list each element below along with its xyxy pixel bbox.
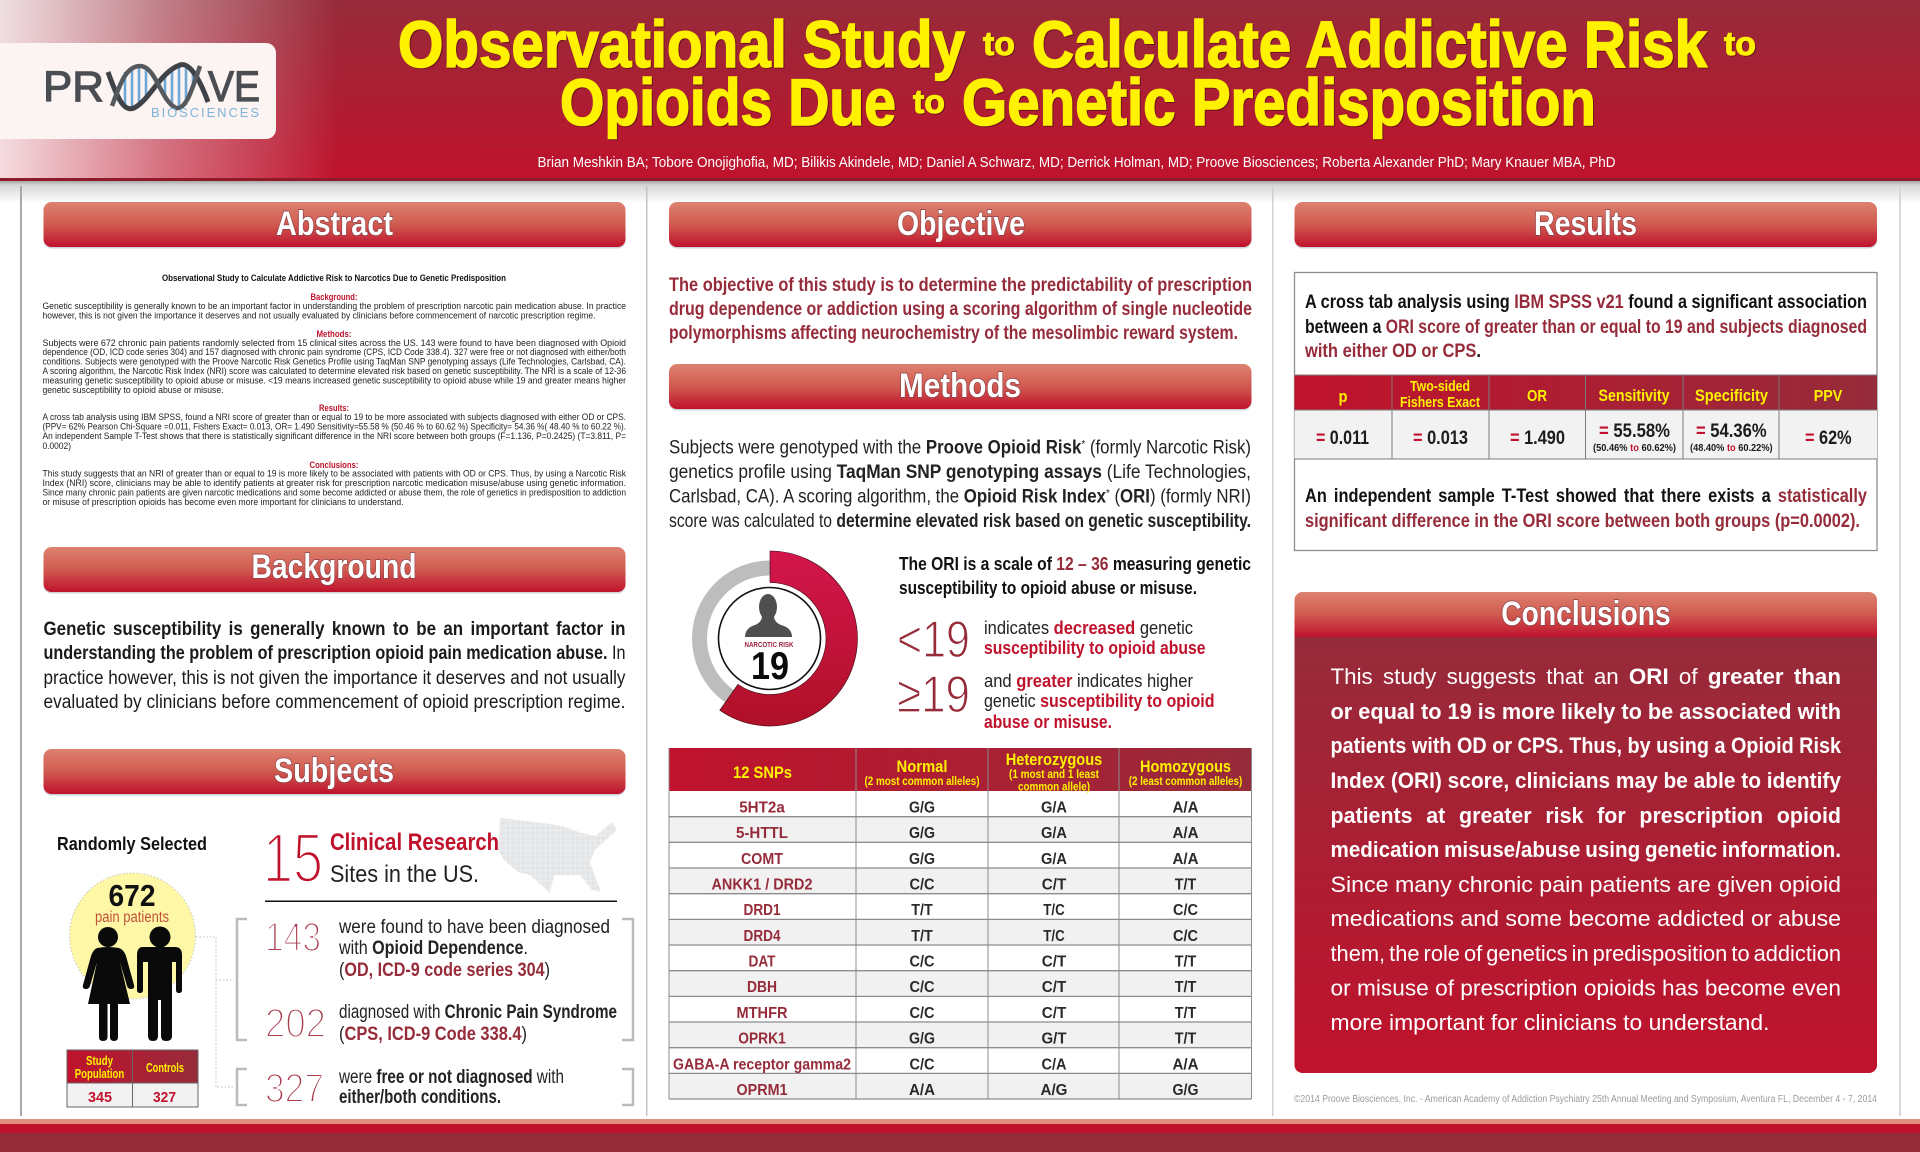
objective text block: polymorphisms affecting neurochemistry of the mesolimbic reward system. — [669, 323, 1238, 344]
table: 12 SNPs: DBH — [747, 979, 777, 996]
abstract text block: conditions. Subjects were genotyped with the Proove Narcotic Risk Genetics Profile using TaqMan SNP genotyping assays (Life Technologies, Carlsbad, CA). — [42, 356, 626, 368]
table: 12 SNPs: C/T — [1042, 876, 1066, 894]
abstract text block: Methods: — [316, 329, 352, 340]
population circle: pain patients — [95, 909, 169, 926]
t-test text: An independent sample T-Test showed that there exists a statistically — [1305, 486, 1867, 507]
stat: 143 opioid dependence — [265, 914, 610, 981]
stat: 327 free or not diagnosed: were free or not diagnosed with — [338, 1067, 564, 1088]
abstract text block: genetic susceptibility to opioid abuse or misuse. — [42, 385, 224, 396]
panel: methods — [669, 364, 1252, 1099]
table: 12 SNPs: (2 most common alleles) — [864, 776, 980, 788]
table: 12 SNPs: C/T — [1042, 979, 1066, 996]
table: 12 SNPs: OPRK1 — [738, 1030, 786, 1048]
table: 12 SNPs: COMT — [741, 851, 783, 868]
stat: 202 chronic pain syndrome: diagnosed with Chronic Pain Syndrome — [339, 1002, 617, 1023]
results intro text — [1304, 292, 1867, 362]
table: statistics: = 62% — [1805, 428, 1852, 449]
dotted connector — [196, 937, 234, 1087]
t-test text — [1305, 486, 1867, 532]
table: 12 SNPs: A/A — [1172, 825, 1199, 842]
abstract text block: Results: — [319, 403, 349, 414]
table: statistics: Two-sided — [1410, 378, 1470, 395]
heading: methods — [669, 364, 1252, 410]
table: 12 SNPs: C/C — [910, 954, 935, 970]
table: 12 SNPs: (2 least common alleles) — [1129, 776, 1242, 788]
map of the United States — [498, 818, 617, 893]
panel: results — [1294, 202, 1877, 550]
conclusions text block: them, the role of genetics in predisposition to addiction — [1330, 941, 1841, 966]
methods text block: * — [1081, 438, 1086, 450]
table: statistics — [1294, 375, 1877, 459]
table: 12 SNPs: G/T — [1042, 1030, 1067, 1048]
table: 12 SNPs: A/A — [1172, 851, 1199, 868]
title: to — [1724, 25, 1756, 62]
background text block: evaluated by clinicians before commencement of opioid prescription regime. — [44, 692, 626, 713]
methods text block: (formly Narcotic Risk) — [1085, 438, 1251, 458]
table: 12 SNPs: G/A — [1041, 851, 1067, 868]
table: statistics: Sensitivity — [1598, 386, 1670, 405]
stat: 327 free or not diagnosed: 327 — [265, 1065, 324, 1111]
table: statistics: = 1.490 — [1510, 428, 1565, 449]
methods text block: * — [1106, 488, 1110, 500]
table: 12 SNPs: (1 most and 1 least — [1009, 769, 1099, 781]
title: Observational Study — [398, 7, 965, 81]
table: statistics: = 55.58% — [1599, 421, 1670, 442]
table: 12 SNPs: G/G — [909, 1030, 935, 1048]
column divider: centre right — [1272, 186, 1274, 1116]
icon: person — [745, 594, 792, 637]
heading: abstract: Abstract — [276, 205, 393, 243]
table: study population and controls: Study — [86, 1054, 113, 1068]
conclusions text block — [1330, 664, 1842, 1035]
less than 19 — [897, 611, 1206, 669]
table: statistics: PPV — [1814, 388, 1843, 405]
methods text block — [669, 438, 1251, 532]
table: 12 SNPs: DRD1 — [744, 902, 781, 919]
table: 12 SNPs: C/T — [1042, 1005, 1066, 1022]
methods text block: (ORI) (formly NRI) — [1115, 486, 1264, 508]
table: statistics: Fishers Exact — [1400, 394, 1480, 411]
stat: 143 opioid dependence: were found to have been diagnosed — [338, 917, 610, 938]
table: 12 SNPs: C/C — [910, 1056, 935, 1074]
methods text block: Carlsbad, CA). A scoring algorithm, the Opioid Risk Index — [669, 486, 1124, 508]
table: 12 SNPs: OPRM1 — [736, 1082, 788, 1099]
abstract text block: measuring genetic susceptibility to opioid abuse or misuse. <19 means increased genetic susceptibility to opioid abuse while 19 and greater means higher — [42, 376, 627, 386]
table: study population and controls: 327 — [153, 1089, 176, 1106]
table: study population and controls: Population — [75, 1067, 124, 1081]
abstract text block: Conclusions: — [310, 460, 358, 471]
table: statistics: = 54.36% — [1696, 421, 1767, 442]
table: 12 SNPs: C/A — [1042, 1056, 1067, 1074]
fifteen clinical research sites: Clinical Research — [330, 829, 499, 856]
table: study population and controls: 345 — [88, 1089, 112, 1106]
abstract text block: A cross tab analysis using IBM SPSS, found a NRI score of greater than or equal to 19 to be more associated with subjects diagnosed with either OD or CPS. — [42, 412, 626, 423]
greater than or equal to 19 — [897, 666, 1214, 732]
table: 12 SNPs: A/A — [909, 1082, 935, 1099]
table: study population and controls: Controls — [146, 1061, 184, 1075]
heading: conclusions — [1294, 592, 1877, 637]
table: 12 SNPs: G/A — [1041, 825, 1067, 842]
table: 12 SNPs: A/A — [1172, 800, 1199, 816]
donut chart: narcotic risk — [692, 551, 857, 726]
abstract text block: or misuse of prescription opioids has become even more important for clinicians to understand. — [42, 497, 404, 508]
conclusions text block: medications and some become addicted or abuse — [1330, 906, 1841, 931]
heading: results: Results — [1534, 205, 1637, 243]
table: 12 SNPs: C/C — [1173, 928, 1198, 945]
table: 12 SNPs: Normal — [896, 757, 948, 776]
table: 12 SNPs: G/A — [1041, 800, 1067, 816]
table: 12 SNPs: T/T — [1175, 1005, 1196, 1022]
table: 12 SNPs: C/C — [910, 979, 935, 996]
methods text block: score was calculated to determine elevated risk based on genetic susceptibility. — [669, 511, 1251, 532]
conclusions text block: patients with OD or CPS. Thus, by using a Opioid Risk — [1330, 733, 1842, 758]
fifteen clinical research sites: Sites in the US. — [330, 861, 479, 888]
conclusions text block: Since many chronic pain patients are given opioid — [1330, 872, 1841, 897]
table: study population and controls — [67, 1050, 198, 1107]
objective text block — [669, 275, 1252, 344]
conclusions text block: This study suggests that an ORI of greater than — [1330, 664, 1841, 689]
donut chart: narcotic risk: NARCOTIC RISK — [744, 640, 794, 649]
table: statistics: = 0.013 — [1413, 428, 1468, 449]
conclusions text block: or misuse of prescription opioids has become even — [1330, 976, 1841, 1000]
background text block: Genetic susceptibility is generally known to be an important factor in — [44, 619, 626, 640]
ORI scale text — [899, 554, 1251, 598]
methods text block: Subjects were genotyped with the Proove Opioid Risk — [669, 438, 1101, 458]
table: 12 SNPs: 5-HTTL — [736, 825, 788, 842]
conclusions text block: Index (ORI) score, clinicians may be able to identify — [1330, 768, 1842, 793]
bracket: diagnosed group — [237, 919, 633, 1040]
table: 12 SNPs: T/C — [1043, 902, 1065, 919]
objective text block: drug dependence or addiction using a scoring algorithm of single nucleotide — [669, 299, 1252, 320]
footer band — [0, 1119, 1920, 1152]
table: 12 SNPs: DAT — [748, 954, 776, 970]
title — [398, 7, 1756, 139]
abstract text block: Subjects were 672 chronic pain patients randomly selected from 15 clinical sites across the US. 143 were found to have been diagnosed with Opioid — [42, 338, 626, 349]
table: 12 SNPs: G/G — [909, 825, 935, 842]
panel: conclusions — [1294, 592, 1877, 1073]
background text block: understanding the problem of prescription opioid pain medication abuse. In — [44, 643, 626, 664]
table: 12 SNPs: 5HT2a — [739, 800, 785, 816]
greater than or equal to 19: and greater indicates higher — [984, 671, 1193, 691]
fifteen clinical research sites: 15 — [263, 819, 323, 897]
heading: objective — [669, 202, 1252, 248]
stat: 202 chronic pain syndrome: (CPS, ICD-9 Code 338.4) — [339, 1024, 527, 1045]
table: statistics: OR — [1527, 388, 1547, 405]
ORI scale text: susceptibility to opioid abuse or misuse. — [899, 578, 1197, 598]
heading: conclusions: Conclusions — [1501, 595, 1671, 633]
table: 12 SNPs — [669, 748, 1252, 1099]
background text block: practice however, this is not given the importance it deserves and not usually — [44, 668, 626, 689]
table: statistics: (48.40% to 60.22%) — [1690, 442, 1773, 454]
abstract text block: 0.0002) — [42, 441, 71, 452]
table: 12 SNPs: C/C — [910, 876, 935, 894]
abstract text block: A scoring algorithm, the Narcotic Risk Index (NRI) score was calculated to determine elevated risk based on genetic susceptibility. The NRI is a scale of 12-36 — [42, 366, 626, 377]
donut chart: narcotic risk: 19 — [751, 645, 789, 688]
stat: 143 opioid dependence: with Opioid Dependence. — [338, 938, 528, 959]
table: 12 SNPs: C/C — [910, 1005, 935, 1022]
table: 12 SNPs: T/T — [1175, 876, 1196, 894]
panel: objective — [669, 202, 1252, 344]
table: statistics: Specificity — [1695, 386, 1768, 405]
table: 12 SNPs: C/T — [1042, 954, 1066, 970]
conclusions text block: or equal to 19 is more likely to be associated with — [1330, 699, 1841, 724]
table: 12 SNPs: T/T — [1175, 1030, 1196, 1048]
stat: 327 free or not diagnosed — [265, 1065, 564, 1111]
abstract text block: however, this is not given the importance it deserves and not usually evaluated by clinicians before commencement of narcotic prescription regime. — [42, 310, 596, 322]
less than 19: indicates decreased genetic — [984, 618, 1193, 638]
abstract text block: Since many chronic pain patients are given narcotic medications and some become addicted or abuse them, the role of genetics in predisposition to addiction — [42, 488, 626, 498]
header banner — [0, 0, 1920, 181]
heading: background — [44, 547, 626, 594]
stat: 143 opioid dependence: 143 — [265, 914, 321, 960]
results box — [1294, 272, 1877, 550]
methods text block: genetics profile using TaqMan SNP genotyping assays (Life Technologies, — [669, 462, 1251, 483]
table: 12 SNPs: 12 SNPs — [733, 763, 792, 782]
table: statistics: p — [1338, 387, 1348, 406]
table: 12 SNPs: common allele) — [1018, 782, 1090, 794]
ORI scale text: The ORI is a scale of 12 – 36 measuring genetic — [899, 554, 1251, 574]
title: to — [983, 25, 1015, 62]
stat: 202 chronic pain syndrome — [265, 1000, 617, 1046]
title: Calculate Addictive Risk — [1032, 7, 1707, 81]
population circle — [70, 873, 196, 999]
panel: subjects — [44, 749, 633, 1111]
heading: subjects: Subjects — [274, 752, 394, 790]
table: 12 SNPs: GABA-A receptor gamma2 — [673, 1056, 851, 1074]
authors: Brian Meshkin BA; Tobore Onojighofia, MD; Bilikis Akindele, MD; Daniel A Schwarz, MD; Derrick Holman, MD; Proove Biosciences; Roberta Alexander PhD; Mary Knauer MBA, PhD — [538, 154, 1616, 171]
less than 19: susceptibility to opioid abuse — [984, 638, 1206, 658]
abstract text block: An independent Sample T-Test shows that there is statistically significant difference in the NRI score between both groups (F=1.136, P=0.2425) (T=3.811, P= — [42, 431, 626, 442]
logo panel: VE — [208, 63, 260, 111]
table: 12 SNPs: Homozygous — [1140, 757, 1231, 776]
conclusions text block: more important for clinicians to understand. — [1330, 1010, 1770, 1035]
table: 12 SNPs: ANKK1 / DRD2 — [712, 876, 813, 894]
randomly selected label: Randomly Selected — [57, 834, 207, 854]
table: statistics: (50.46% to 60.62%) — [1593, 442, 1676, 454]
abstract text block: Background: — [310, 292, 358, 303]
abstract text block: Genetic susceptibility is generally known to be an important factor in understanding the problem of prescription narcotic pain medication abuse. In practice — [42, 301, 626, 312]
conclusions text block: patients at greater risk for prescription opioid — [1330, 803, 1841, 828]
heading: results — [1294, 202, 1877, 248]
panel: abstract — [42, 202, 627, 508]
logo panel: PR — [43, 63, 104, 111]
table: 12 SNPs: T/T — [1175, 954, 1196, 970]
stat: 202 chronic pain syndrome: 202 — [265, 1000, 326, 1046]
logo panel — [0, 43, 276, 139]
page shading under header — [0, 181, 1920, 203]
greater than or equal to 19: ≥19 — [897, 666, 970, 724]
table: 12 SNPs: G/G — [1172, 1082, 1198, 1099]
abstract text block: dependence (OD, ICD code series 304) and 157 diagnosed with chronic pain syndrome (CPS, ICD Code 338.4). 327 were free or not diagnosed with either/both — [42, 347, 626, 358]
title: Opioids Due — [560, 65, 896, 139]
conclusions body — [1294, 637, 1877, 1073]
abstract text block: (PPV= 62% Pearson Chi-Square =0.011, Fishers Exact= 0.013, OR= 1.490 Sensitivity=55.58 % (50.46 % to 60.62 %) Specificity= 54.36 %( 48.40 % to 60.22 %). — [42, 422, 626, 432]
conclusions text block: medication misuse/abuse using genetic information. — [1330, 837, 1841, 862]
background text block — [44, 619, 626, 713]
abstract text block: This study suggests that an NRI of greater than or equal to 19 is more likely to be associated with patients with OD or CPS. Thus, by using a Narcotic Risk — [42, 468, 626, 480]
title: Genetic Predisposition — [962, 65, 1596, 139]
less than 19: <19 — [897, 611, 970, 669]
table: 12 SNPs: Heterozygous — [1006, 751, 1102, 769]
table: 12 SNPs: MTHFR — [736, 1005, 788, 1022]
heading: methods: Methods — [899, 367, 1021, 405]
stat: 327 free or not diagnosed: either/both conditions. — [339, 1087, 501, 1108]
table: 12 SNPs: C/C — [1173, 902, 1198, 919]
table: 12 SNPs: G/G — [909, 800, 935, 816]
table: 12 SNPs: A/G — [1040, 1082, 1068, 1099]
table: statistics: = 0.011 — [1316, 428, 1369, 449]
heading: objective: Objective — [897, 205, 1025, 243]
abstract text block — [42, 273, 627, 508]
column divider: centre left — [646, 186, 648, 1116]
abstract text block: Observational Study to Calculate Addictive Risk to Narcotics Due to Genetic Predisposition — [162, 273, 506, 284]
results intro text: with either OD or CPS. — [1304, 341, 1481, 362]
table: 12 SNPs: G/G — [909, 851, 935, 868]
abstract text block: Index (NRI) score, clinicians may be able to identify patients at greater risk for prescription narcotic medication misuse/abuse using genetic information. — [42, 478, 626, 489]
fifteen clinical research sites — [263, 819, 499, 897]
column divider: left — [20, 186, 22, 1116]
panel: background — [44, 547, 626, 713]
heading: abstract — [44, 202, 626, 248]
table: 12 SNPs: T/C — [1043, 928, 1065, 945]
bracket: free group — [237, 1069, 633, 1105]
population circle: 672 — [108, 878, 156, 913]
table: 12 SNPs: A/A — [1172, 1056, 1199, 1074]
heading: subjects — [44, 749, 626, 796]
column divider: right — [1899, 186, 1901, 1116]
icon: man — [137, 926, 182, 1041]
greater than or equal to 19: genetic susceptibility to opioid — [984, 691, 1214, 711]
table: 12 SNPs: T/T — [911, 928, 933, 945]
objective text block: The objective of this study is to determine the predictability of prescription — [669, 275, 1252, 296]
title: to — [913, 83, 945, 120]
stat: 143 opioid dependence: (OD, ICD-9 code series 304) — [339, 960, 550, 981]
heading: background: Background — [252, 548, 416, 586]
logo panel: BIOSCIENCES — [151, 105, 259, 120]
greater than or equal to 19: abuse or misuse. — [984, 712, 1112, 732]
table: 12 SNPs: DRD4 — [744, 928, 781, 945]
icon: woman — [83, 927, 134, 1041]
table: 12 SNPs: T/T — [1175, 979, 1196, 996]
results intro text: A cross tab analysis using IBM SPSS v21 found a significant association — [1305, 292, 1867, 313]
table: 12 SNPs: T/T — [911, 902, 933, 919]
